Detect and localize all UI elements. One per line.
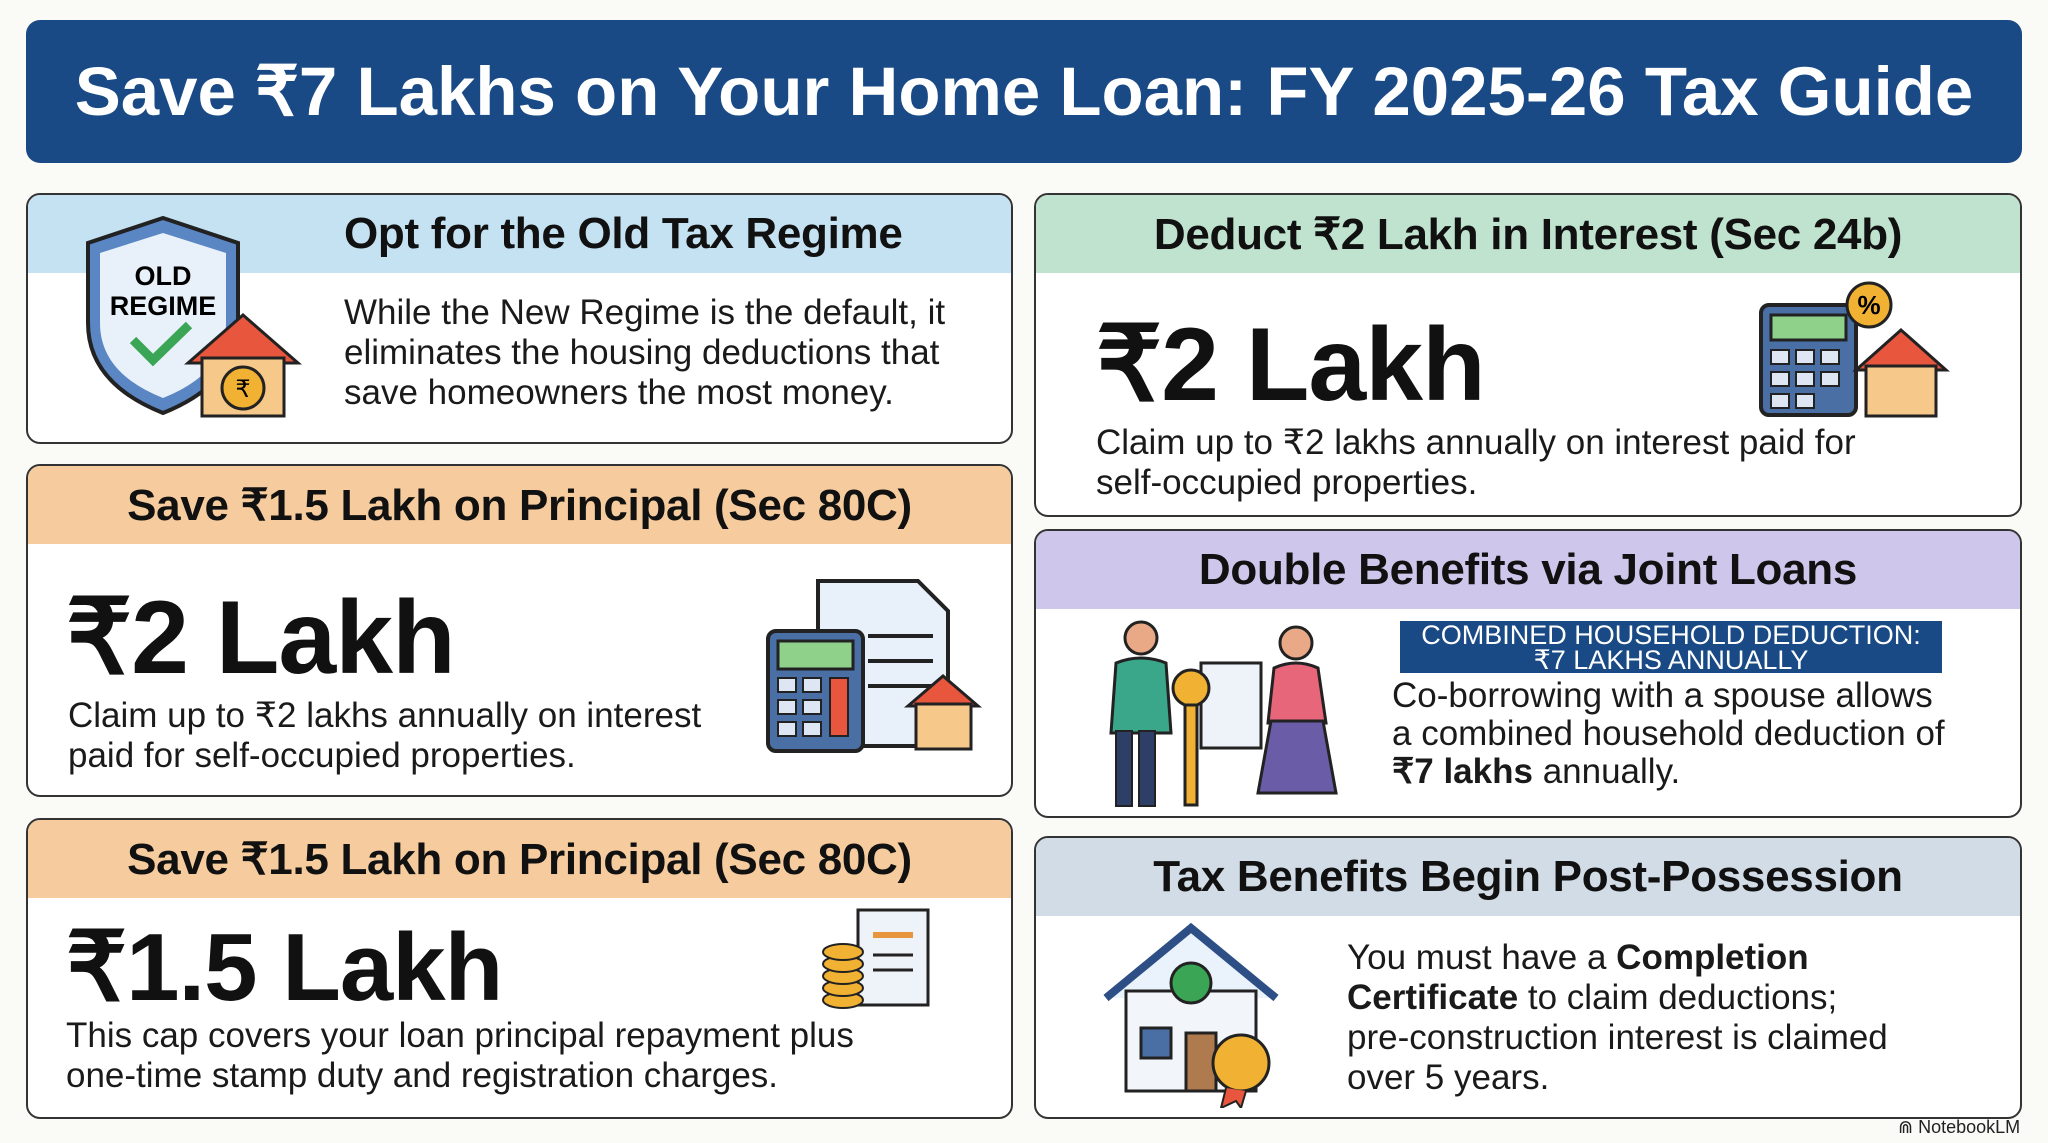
text block: self-occupied properties. (1096, 463, 1477, 502)
panel: joint loans (1034, 529, 2022, 818)
heading (28, 466, 1011, 544)
text block: Claim up to ₹2 lakhs annually on interest paid for (1096, 423, 1856, 462)
panel: principal 80C (1.5 lakh) (26, 818, 1013, 1119)
panel: post-possession (1034, 836, 2022, 1119)
icon: shield with house (86, 216, 302, 418)
icon: calculator and document (766, 579, 982, 753)
title (26, 20, 2022, 163)
text block: one-time stamp duty and registration charges. (66, 1056, 778, 1095)
callout label (1400, 621, 1942, 673)
heading: Save ₹1.5 Lakh on Principal (Sec 80C) (127, 480, 912, 530)
text block: eliminates the housing deductions that (344, 333, 939, 372)
text block (1096, 423, 1856, 502)
heading: Tax Benefits Begin Post-Possession (1153, 852, 1903, 901)
icon: house with badge (1104, 923, 1278, 1108)
text block (1347, 938, 1888, 1097)
icon: calculator percent house: % (1857, 290, 1881, 320)
text block: save homeowners the most money. (344, 373, 894, 412)
text block: pre-construction interest is claimed (1347, 1018, 1888, 1057)
heading: Deduct ₹2 Lakh in Interest (Sec 24b) (1154, 210, 1902, 258)
icon: coins and receipt (822, 908, 930, 1009)
text block: paid for self-occupied properties. (68, 736, 576, 775)
big number: ₹1.5 Lakh (66, 914, 502, 1021)
callout label: COMBINED HOUSEHOLD DEDUCTION: (1421, 620, 1921, 650)
icon: couple with key (1109, 620, 1338, 807)
text block (66, 1016, 854, 1095)
icon: shield with house: ₹ (235, 376, 251, 403)
heading (1036, 531, 2020, 609)
heading: Double Benefits via Joint Loans (1199, 545, 1857, 594)
big number: ₹2 Lakh (66, 580, 455, 696)
title: Save ₹7 Lakhs on Your Home Loan: FY 2025-26 Tax Guide (75, 52, 1973, 130)
panel: interest 24b (1034, 193, 2022, 517)
text block: You must have a Completion (1347, 938, 1809, 977)
text block: over 5 years. (1347, 1058, 1549, 1097)
text block: Certificate to claim deductions; (1347, 978, 1837, 1017)
heading (28, 195, 1011, 273)
big number: ₹2 Lakh (1096, 307, 1485, 423)
heading (1036, 195, 2020, 273)
heading: Save ₹1.5 Lakh on Principal (Sec 80C) (127, 834, 912, 884)
text block: a combined household deduction of (1392, 714, 1945, 753)
heading (1036, 838, 2020, 916)
panel: old regime (26, 193, 1013, 444)
text block (344, 293, 945, 412)
text block (1392, 676, 1945, 791)
icon: shield with house: OLD (134, 261, 192, 291)
heading (28, 820, 1011, 898)
text block: ₹7 lakhs annually. (1392, 752, 1680, 791)
watermark: ⋒ NotebookLM (1898, 1117, 2020, 1137)
text block: Claim up to ₹2 lakhs annually on interest (68, 696, 701, 735)
text block: This cap covers your loan principal repayment plus (66, 1016, 854, 1055)
text block: Co-borrowing with a spouse allows (1392, 676, 1933, 715)
icon: shield with house: REGIME (110, 291, 216, 321)
callout label: ₹7 LAKHS ANNUALLY (1534, 645, 1808, 675)
text block (68, 696, 701, 775)
icon: calculator percent house (1759, 282, 1950, 418)
text block: While the New Regime is the default, it (344, 293, 945, 332)
heading: Opt for the Old Tax Regime (344, 209, 903, 258)
panel: principal 80C (2 lakh) (26, 464, 1013, 797)
